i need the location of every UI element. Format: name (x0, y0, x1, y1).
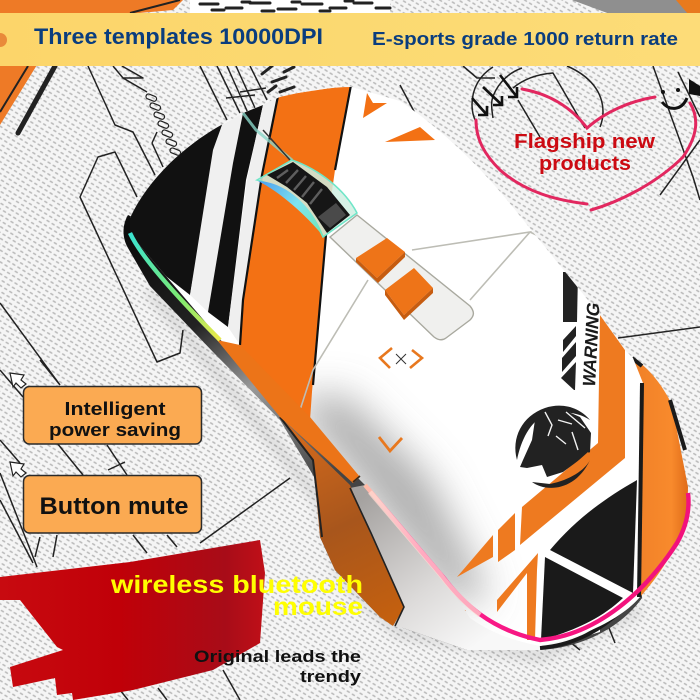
white stripe two (228, 97, 277, 345)
button: button mute: Button mute (40, 493, 188, 520)
background: top pattern (190, 0, 390, 92)
mouse: side grip (280, 417, 404, 626)
banner text: three templates: Three templates 10000DPI (34, 24, 323, 49)
mark: chevron (379, 437, 402, 451)
red brush stroke (0, 540, 265, 700)
black triangle lower (541, 557, 623, 640)
mouse: scroll wheel (267, 162, 350, 233)
heart text: flagship new products: Flagship new (514, 130, 655, 153)
mouse: button channel (330, 215, 473, 340)
heart text: flagship new products (514, 130, 655, 175)
mouse: right orange side (633, 358, 688, 597)
mouse: scroll wheel glow (257, 160, 357, 237)
black triangle upper (550, 480, 637, 593)
mouse: side orange strip (217, 340, 360, 483)
glass line above wheel (243, 113, 292, 160)
black stripe two (208, 105, 263, 327)
button: button mute (24, 476, 202, 533)
caption: original leads the trendy: trendy (300, 667, 362, 686)
mouse: side button (632, 358, 685, 450)
warning stripes (561, 272, 578, 390)
banner text: e-sports grade: E-sports grade 1000 return rate (372, 28, 678, 49)
heart doodle with arrows (472, 75, 700, 210)
orange centre band (240, 85, 351, 420)
mouse: front orange button (356, 238, 405, 278)
caption: wireless bluetooth mouse: wireless bluetooth (110, 571, 363, 599)
caption: wireless bluetooth mouse (110, 571, 363, 621)
cursor icon one (10, 373, 26, 388)
thin shell seams (300, 230, 536, 408)
mouse: black edge line (639, 383, 642, 597)
button: intelligent power saving: power saving (49, 420, 181, 440)
background: chain pattern (145, 93, 181, 156)
mouse: soft shadow (150, 290, 640, 656)
button: intelligent power saving (24, 386, 202, 444)
cursor icon two (10, 462, 26, 477)
banner (0, 13, 700, 66)
background: top right grey and orange corner (572, 0, 700, 14)
mark: crosshair bracket (380, 348, 422, 368)
background: orange corner (0, 0, 183, 125)
band outlines (240, 85, 351, 385)
heart outline (476, 89, 696, 210)
caption: original leads the trendy: Original leads the (194, 647, 361, 666)
arrows (472, 75, 517, 115)
faint orange mark (464, 610, 466, 611)
white stripe one (190, 113, 243, 312)
caption: original leads the trendy (194, 647, 362, 686)
mouse: top shell artwork (120, 85, 637, 640)
mouse (120, 85, 689, 656)
smiley (661, 79, 700, 108)
black rear panel (130, 124, 222, 295)
warning text: WARNING (579, 300, 603, 389)
caption: wireless bluetooth mouse: mouse (273, 593, 363, 621)
mouse: lion logo (515, 406, 592, 488)
button: intelligent power saving: Intelligent (64, 399, 166, 419)
mouse: rgb light strip (130, 233, 689, 640)
mouse: lower body (350, 485, 600, 650)
mouse: left underbody (124, 215, 642, 650)
orange chevron marks (363, 93, 387, 118)
heart text: flagship new products: products (539, 152, 631, 175)
mouse: bottom black edge (540, 610, 622, 648)
mouse: rear orange button (385, 268, 433, 315)
orange chevron with stripes (520, 315, 625, 545)
mouse: white top shell (130, 87, 643, 646)
shell shading (290, 395, 490, 600)
